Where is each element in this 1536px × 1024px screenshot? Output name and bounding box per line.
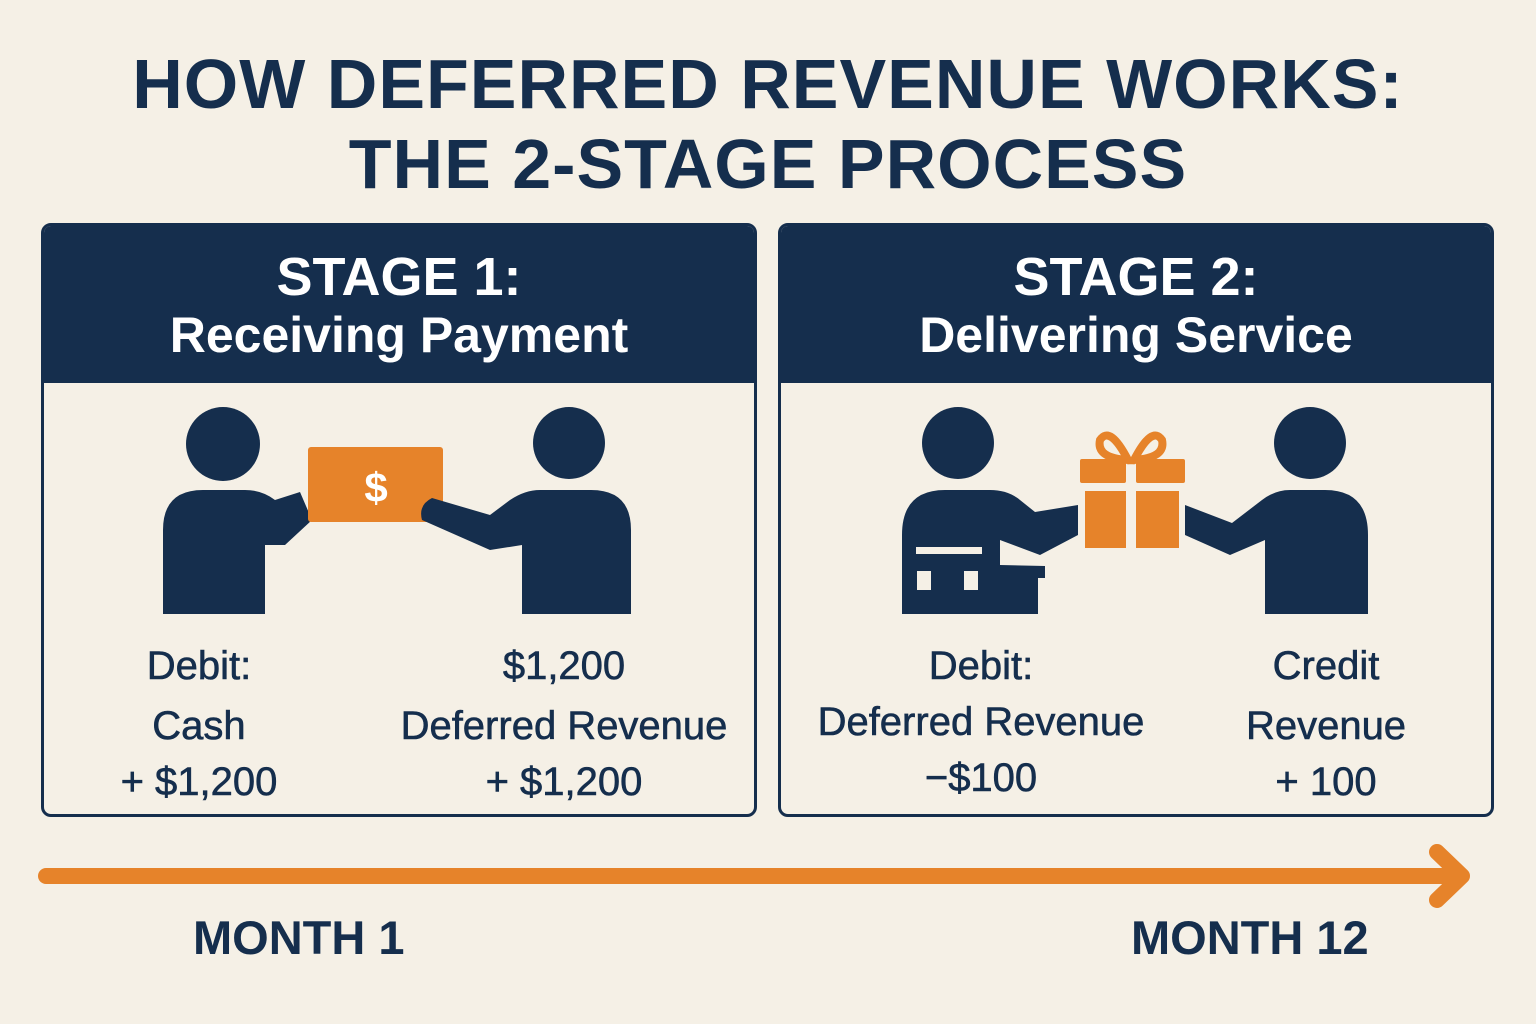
icon: payer person xyxy=(163,407,312,614)
title: HOW DEFERRED REVENUE WORKS: xyxy=(132,45,1404,123)
icon: cash card: $ xyxy=(364,464,388,511)
text: debit deferred revenue xyxy=(818,644,1144,800)
text: deferred revenue: $1,200 xyxy=(503,644,625,688)
header: stage 2 xyxy=(781,226,1491,383)
text: deferred revenue: + $1,200 xyxy=(486,760,642,804)
header: stage 2: STAGE 2: xyxy=(1013,247,1259,307)
text: deferred revenue xyxy=(401,644,727,804)
icon: customer person xyxy=(1185,407,1368,614)
text: debit deferred revenue: −$100 xyxy=(925,756,1037,800)
text: credit revenue: + 100 xyxy=(1275,760,1377,804)
text: credit revenue xyxy=(1246,644,1406,804)
arrow: timeline xyxy=(46,852,1462,900)
icon: business person xyxy=(902,407,1078,614)
header: stage 1: Receiving Payment xyxy=(170,307,628,363)
text: debit cash xyxy=(121,644,277,804)
label: month 12: MONTH 12 xyxy=(1131,911,1369,964)
text: deferred revenue: Deferred Revenue xyxy=(401,704,727,748)
text: debit cash: + $1,200 xyxy=(121,760,277,804)
text: debit deferred revenue: Deferred Revenue xyxy=(818,700,1144,744)
text: debit cash: Debit: xyxy=(147,644,251,688)
title xyxy=(132,45,1404,203)
icon: cash card xyxy=(308,447,443,522)
label: month 1: MONTH 1 xyxy=(193,911,404,964)
header: stage 1: STAGE 1: xyxy=(276,247,522,307)
header: stage 1 xyxy=(44,226,754,383)
icon: receiver person xyxy=(421,407,631,614)
panel: stage 1 xyxy=(41,223,757,817)
title: THE 2-STAGE PROCESS xyxy=(349,125,1187,203)
header: stage 2: Delivering Service xyxy=(919,307,1353,363)
text: debit deferred revenue: Debit: xyxy=(929,644,1033,688)
text: credit revenue: Credit xyxy=(1273,644,1379,688)
icon: gift xyxy=(1080,436,1185,548)
panel: stage 2 xyxy=(778,223,1494,817)
text: credit revenue: Revenue xyxy=(1246,704,1406,748)
text: debit cash: Cash xyxy=(152,704,246,748)
